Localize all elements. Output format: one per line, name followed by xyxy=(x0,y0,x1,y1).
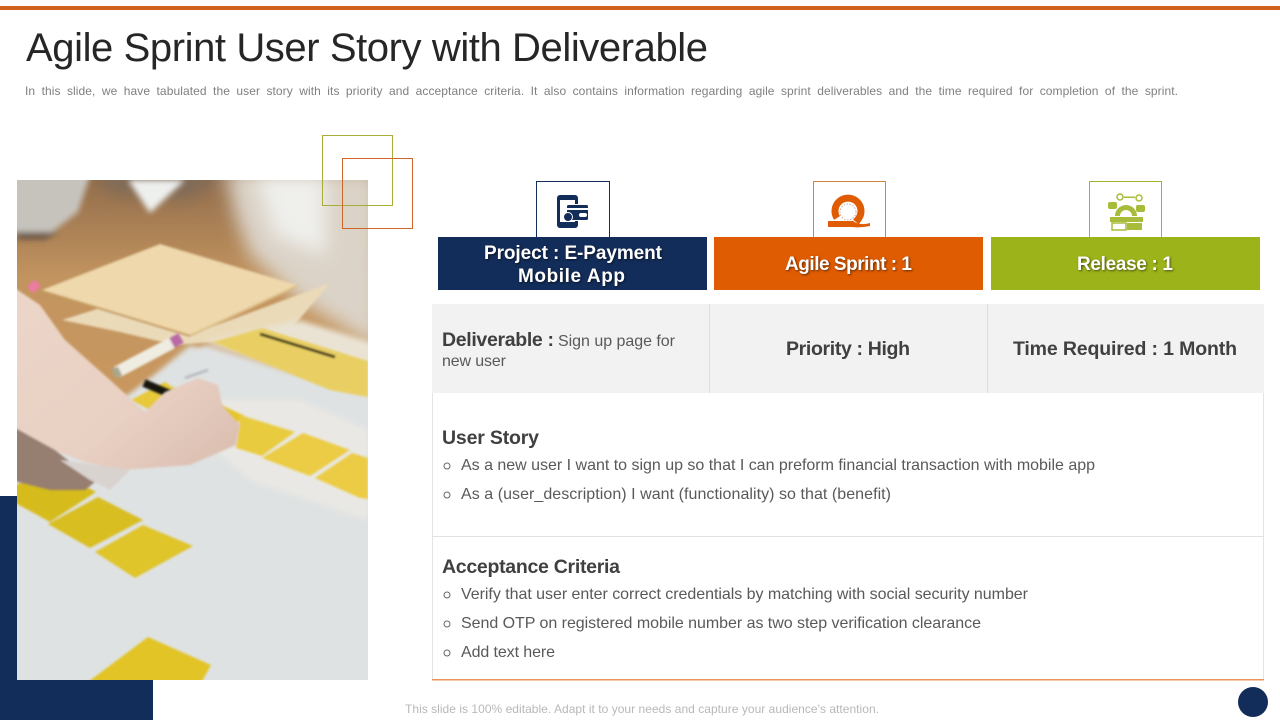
deliverable cell: new user xyxy=(442,353,507,370)
photo: white paper sheet xyxy=(126,317,368,515)
decorative orange square xyxy=(342,158,412,228)
acceptance criteria section: Acceptance Criteria xyxy=(442,556,620,578)
user story section: User Story xyxy=(442,427,539,449)
icon: phone with card xyxy=(557,195,588,228)
photo: arm and hand xyxy=(10,285,240,490)
icon box: e-payment xyxy=(536,182,610,238)
header: agile sprint: Agile Sprint : 1 xyxy=(785,254,912,275)
priority cell: Priority : High xyxy=(786,338,910,360)
header: project xyxy=(438,237,707,290)
summary row xyxy=(432,304,1264,393)
deliverable cell: Deliverable : xyxy=(442,329,554,351)
header: project: Mobile App xyxy=(518,266,625,287)
navy corner block xyxy=(0,496,153,720)
deliverable cell xyxy=(442,329,676,370)
header: project: Project : E-Payment xyxy=(484,243,663,264)
icon: sprint loop xyxy=(828,198,870,227)
content panel xyxy=(432,393,1264,680)
page number circle xyxy=(1238,687,1268,717)
photo: hand placing sticky notes xyxy=(5,170,380,690)
header: release: Release : 1 xyxy=(1077,254,1173,275)
photo: pen xyxy=(144,370,208,394)
header: release xyxy=(991,237,1260,290)
icon: release box with gear xyxy=(1108,194,1145,230)
photo: yellow long strip xyxy=(213,328,368,397)
decorative olive square xyxy=(322,136,392,206)
header: agile sprint xyxy=(714,237,983,290)
user story section xyxy=(442,427,1095,503)
user story section: As a new user I want to sign up so that I can preform financial transaction with mobile app xyxy=(461,457,1095,474)
photo: tan papers xyxy=(42,244,330,345)
subtitle description: In this slide, we have tabulated the user story with its priority and acceptance criteria. It also contains information regarding agile sprint deliverables and the time required for completion of the sprint. xyxy=(25,84,1178,98)
footer note: This slide is 100% editable. Adapt it to your needs and capture your audience's attention. xyxy=(405,702,879,716)
photo: wooden floor xyxy=(17,180,368,397)
acceptance criteria section xyxy=(442,556,1029,661)
title: Agile Sprint User Story with Deliverable xyxy=(26,26,708,70)
time required cell: Time Required : 1 Month xyxy=(1013,338,1237,360)
icon box: agile sprint xyxy=(814,182,886,238)
icon box: release xyxy=(1090,182,1162,238)
user story section: As a (user_description) I want (functionality) so that (benefit) xyxy=(461,486,891,503)
top accent bar xyxy=(0,6,1280,10)
acceptance criteria section: Verify that user enter correct credentials by matching with social security number xyxy=(461,586,1029,603)
deliverable cell: Sign up page for xyxy=(558,333,676,350)
photo: sticky notes xyxy=(10,382,368,685)
acceptance criteria section: Send OTP on registered mobile number as two step verification clearance xyxy=(461,615,981,632)
acceptance criteria section: Add text here xyxy=(461,644,555,661)
photo: white marker xyxy=(30,283,181,374)
photo: blurred background objects xyxy=(100,180,368,344)
